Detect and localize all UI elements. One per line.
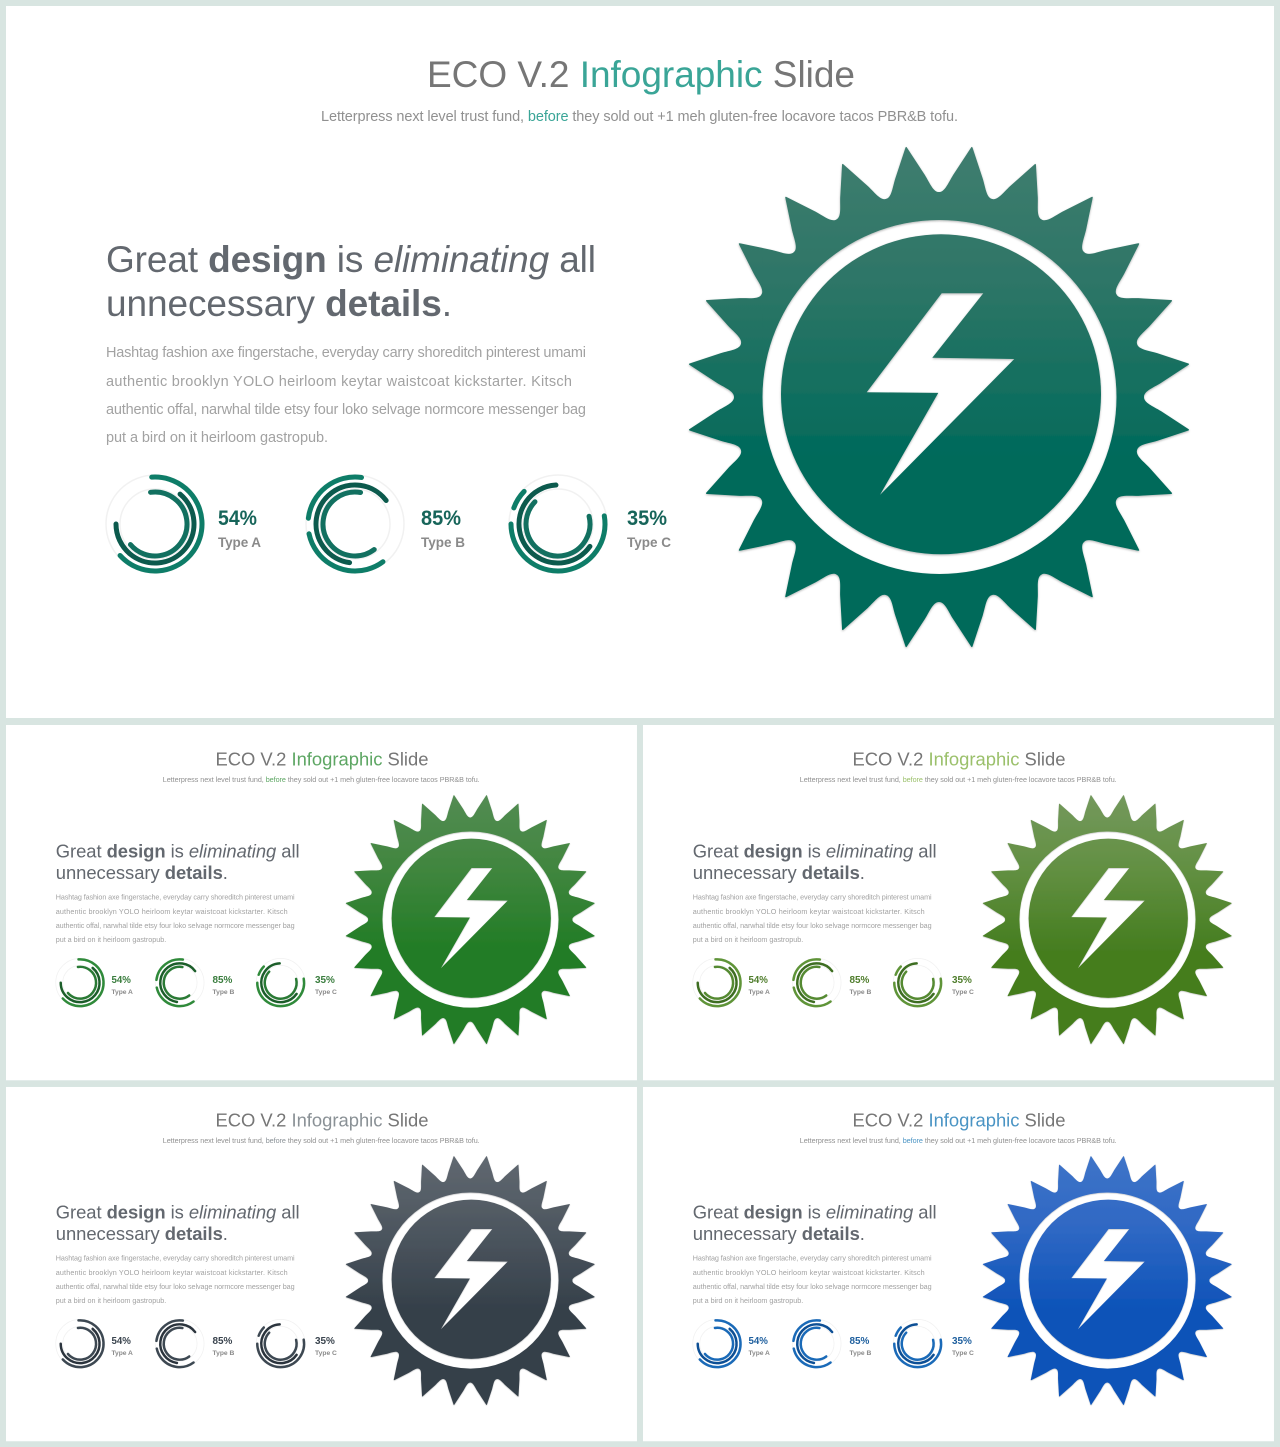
title: ECO V.2 Infographic Slide xyxy=(215,1109,428,1130)
stat: 54% Type A: 54% xyxy=(748,975,768,986)
body text: put a bird on it heirloom gastropub. xyxy=(56,1296,166,1305)
stat: 85% Type B xyxy=(849,975,872,996)
stat: 85% Type B: 85% xyxy=(849,975,869,986)
subtitle: Letterpress next level trust fund, before they sold out +1 meh gluten-free locavore tacos PBR&B tofu. xyxy=(321,109,958,125)
panel: dark slate slide xyxy=(6,1087,637,1441)
title: ECO V.2 Infographic Slide xyxy=(852,748,1065,769)
stat: 54% Type A xyxy=(218,507,261,550)
heading: Great design is eliminating all xyxy=(56,1201,300,1222)
icon: sun badge with lightning bolt xyxy=(346,795,595,1045)
stat: 85% Type B: 85% xyxy=(421,507,461,530)
stat: 54% Type A: 54% xyxy=(111,1336,131,1347)
body text: authentic offal, narwhal tilde etsy four loko selvage normcore messenger bag xyxy=(106,402,586,418)
stat: 85% Type B: Type B xyxy=(212,1350,235,1357)
stat: 85% Type B xyxy=(849,1336,872,1357)
stat: 54% Type A xyxy=(111,975,133,996)
title: ECO V.2 Infographic Slide xyxy=(215,748,428,769)
body text xyxy=(106,345,586,446)
stat: 35% Type C xyxy=(627,507,671,550)
stat: 35% Type C xyxy=(315,975,337,996)
donut chart: Type C xyxy=(888,953,948,1013)
donut chart: Type C xyxy=(251,1314,311,1374)
stat: 35% Type C: Type C xyxy=(315,1350,337,1357)
icon: sun badge with lightning bolt xyxy=(982,1156,1232,1406)
heading: Great design is eliminating all xyxy=(106,239,596,280)
body text: Hashtag fashion axe fingerstache, everyday carry shoreditch pinterest umami xyxy=(56,1254,295,1263)
stat: 85% Type B xyxy=(212,975,235,996)
stat: 85% Type B: 85% xyxy=(212,1336,232,1347)
stat: 35% Type C xyxy=(952,1336,974,1357)
body text: put a bird on it heirloom gastropub. xyxy=(106,430,328,446)
stat: 35% Type C: Type C xyxy=(952,989,974,996)
donut chart: Type C xyxy=(251,953,311,1013)
stat: 35% Type C: Type C xyxy=(315,989,337,996)
donut chart: Type B xyxy=(147,1311,212,1376)
donut chart: Type A xyxy=(690,1316,744,1371)
stat: 54% Type A xyxy=(748,1336,770,1357)
stat: 54% Type A xyxy=(748,975,770,996)
subtitle: Letterpress next level trust fund, before they sold out +1 meh gluten-free locavore tacos PBR&B tofu. xyxy=(800,1136,1117,1145)
stat: 54% Type A: Type A xyxy=(111,1350,133,1357)
stat: 54% Type A: Type A xyxy=(111,989,133,996)
panel: green slide xyxy=(6,725,637,1080)
heading xyxy=(56,1201,300,1244)
heading: unnecessary details. xyxy=(693,862,865,883)
donut chart: Type C xyxy=(888,1314,948,1374)
stat: 54% Type A: Type A xyxy=(748,989,770,996)
body text xyxy=(693,1254,932,1305)
heading: unnecessary details. xyxy=(693,1223,865,1244)
heading: unnecessary details. xyxy=(56,862,228,883)
body text: Hashtag fashion axe fingerstache, everyday carry shoreditch pinterest umami xyxy=(693,893,932,902)
body text: authentic brooklyn YOLO heirloom keytar waistcoat kickstarter. Kitsch xyxy=(693,907,925,916)
subtitle: Letterpress next level trust fund, before they sold out +1 meh gluten-free locavore tacos PBR&B tofu. xyxy=(800,775,1117,784)
donut chart: Type C xyxy=(498,464,618,584)
stat: 35% Type C xyxy=(952,975,974,996)
heading xyxy=(693,1201,937,1244)
stat: 35% Type C: Type C xyxy=(952,1350,974,1357)
body text: authentic brooklyn YOLO heirloom keytar waistcoat kickstarter. Kitsch xyxy=(56,1268,288,1277)
donut chart: Type B xyxy=(147,950,212,1015)
heading xyxy=(693,840,937,883)
body text: authentic offal, narwhal tilde etsy four loko selvage normcore messenger bag xyxy=(693,921,932,930)
subtitle: Letterpress next level trust fund, before they sold out +1 meh gluten-free locavore tacos PBR&B tofu. xyxy=(163,775,480,784)
heading: Great design is eliminating all xyxy=(693,1201,937,1222)
stat: 85% Type B: Type B xyxy=(212,989,235,996)
stat: 54% Type A: Type A xyxy=(748,1350,770,1357)
subtitle: Letterpress next level trust fund, before they sold out +1 meh gluten-free locavore tacos PBR&B tofu. xyxy=(163,1136,480,1145)
stat: 85% Type B: 85% xyxy=(849,1336,869,1347)
body text: put a bird on it heirloom gastropub. xyxy=(56,935,166,944)
stat: 85% Type B: Type B xyxy=(849,1350,872,1357)
heading xyxy=(106,239,596,324)
stat: 54% Type A xyxy=(111,1336,133,1357)
donut chart: Type B xyxy=(784,950,849,1015)
stat: 35% Type C xyxy=(315,1336,337,1357)
panel: main teal slide xyxy=(6,6,1274,718)
stat: 85% Type B xyxy=(212,1336,235,1357)
stat: 85% Type B: Type B xyxy=(849,989,872,996)
panel: blue slide xyxy=(643,1087,1274,1441)
donut chart: Type A xyxy=(53,1316,107,1371)
body text xyxy=(56,893,295,944)
body text: authentic offal, narwhal tilde etsy four loko selvage normcore messenger bag xyxy=(56,1282,295,1291)
icon: sun badge with lightning bolt xyxy=(982,795,1232,1045)
stat: 54% Type A: 54% xyxy=(748,1336,768,1347)
stat: 54% Type A: 54% xyxy=(111,975,131,986)
icon: sun badge with lightning bolt xyxy=(688,146,1190,649)
stat: 35% Type C: 35% xyxy=(315,1336,335,1347)
donut chart: Type B xyxy=(784,1311,849,1376)
body text: Hashtag fashion axe fingerstache, everyday carry shoreditch pinterest umami xyxy=(106,345,586,361)
title: ECO V.2 Infographic Slide xyxy=(427,54,855,95)
body text: Hashtag fashion axe fingerstache, everyday carry shoreditch pinterest umami xyxy=(693,1254,932,1263)
heading: Great design is eliminating all xyxy=(693,840,937,861)
body text: Hashtag fashion axe fingerstache, everyday carry shoreditch pinterest umami xyxy=(56,893,295,902)
body text: authentic offal, narwhal tilde etsy four loko selvage normcore messenger bag xyxy=(693,1282,932,1291)
stat: 85% Type B: Type B xyxy=(421,535,465,550)
body text: put a bird on it heirloom gastropub. xyxy=(693,1296,803,1305)
donut chart: Type A xyxy=(53,955,107,1010)
donut chart: Type A xyxy=(690,955,744,1010)
stat: 35% Type C: 35% xyxy=(315,975,335,986)
stat: 54% Type A: 54% xyxy=(218,507,257,530)
stat: 35% Type C: 35% xyxy=(952,1336,972,1347)
stat: 54% Type A: Type A xyxy=(218,535,261,550)
body text: authentic brooklyn YOLO heirloom keytar waistcoat kickstarter. Kitsch xyxy=(106,374,572,390)
stat: 85% Type B xyxy=(421,507,465,550)
heading xyxy=(56,840,300,883)
body text xyxy=(693,893,932,944)
heading: unnecessary details. xyxy=(56,1223,228,1244)
donut chart: Type A xyxy=(100,469,210,579)
body text: authentic offal, narwhal tilde etsy four loko selvage normcore messenger bag xyxy=(56,921,295,930)
body text: authentic brooklyn YOLO heirloom keytar waistcoat kickstarter. Kitsch xyxy=(693,1268,925,1277)
icon: sun badge with lightning bolt xyxy=(346,1156,595,1406)
heading: unnecessary details. xyxy=(106,283,452,324)
body text: put a bird on it heirloom gastropub. xyxy=(693,935,803,944)
panel: lime slide xyxy=(643,725,1274,1080)
donut chart: Type B xyxy=(289,458,421,590)
stat: 35% Type C: 35% xyxy=(627,507,667,530)
title: ECO V.2 Infographic Slide xyxy=(852,1109,1065,1130)
stat: 85% Type B: 85% xyxy=(212,975,232,986)
stat: 35% Type C: 35% xyxy=(952,975,972,986)
body text xyxy=(56,1254,295,1305)
heading: Great design is eliminating all xyxy=(56,840,300,861)
body text: authentic brooklyn YOLO heirloom keytar waistcoat kickstarter. Kitsch xyxy=(56,907,288,916)
stat: 35% Type C: Type C xyxy=(627,535,671,550)
